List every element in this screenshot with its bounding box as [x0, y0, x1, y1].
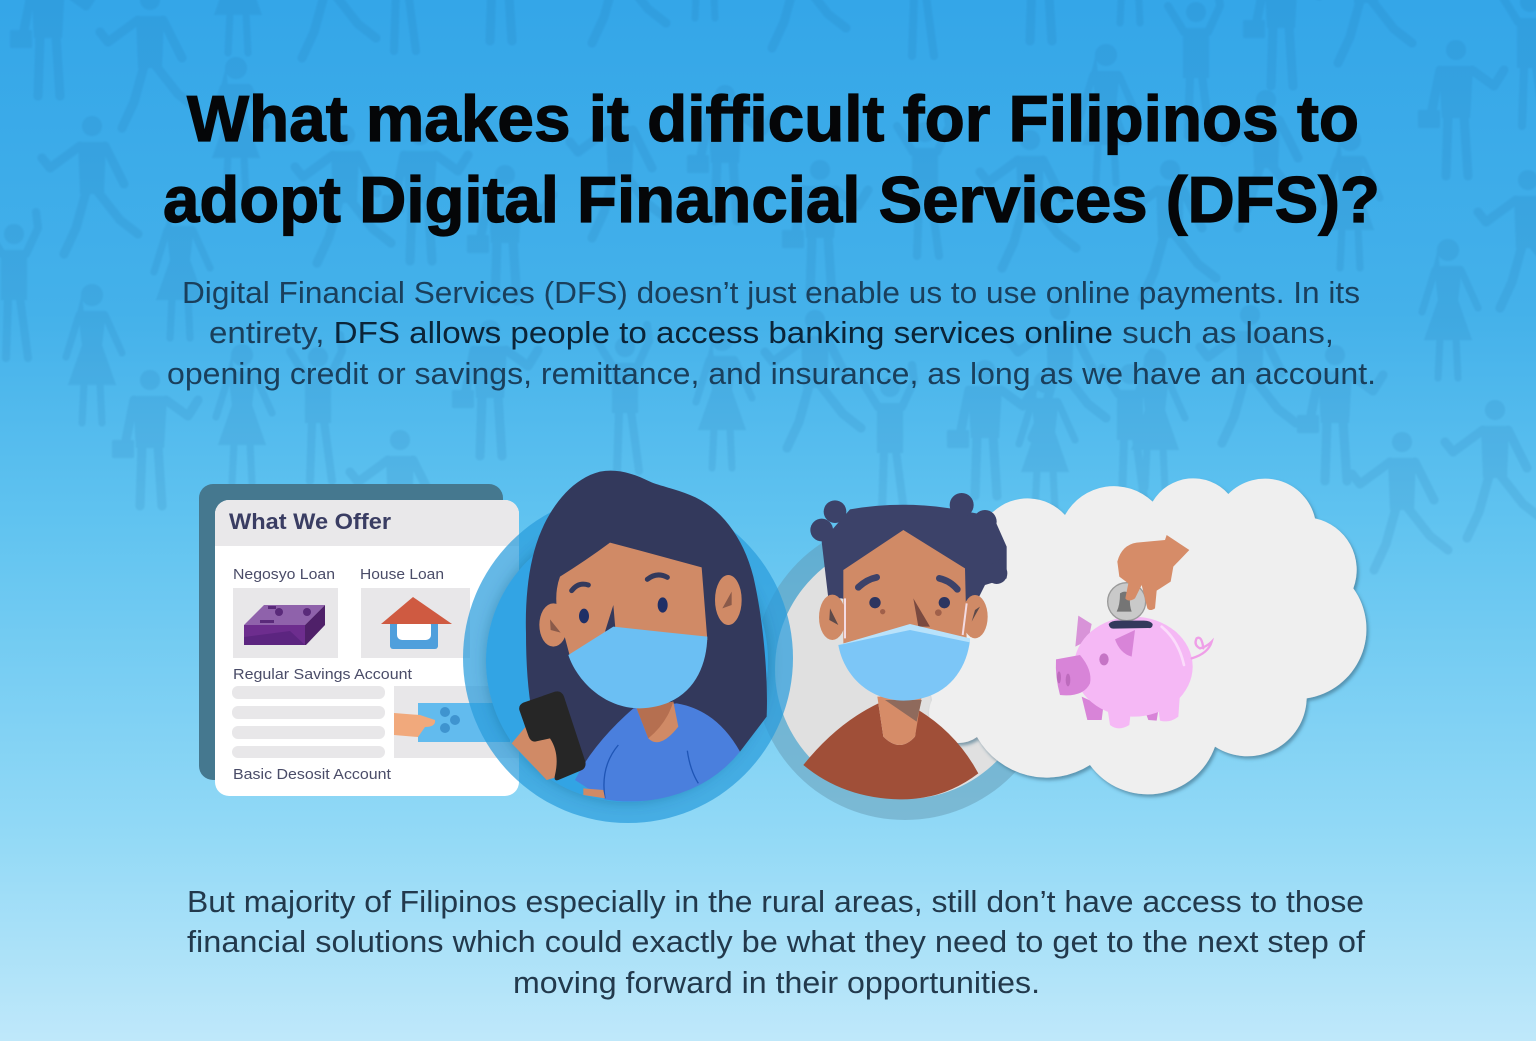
card heading: What We Offer [229, 509, 391, 534]
intro paragraph [167, 275, 1376, 391]
closing paragraph [187, 884, 1365, 1000]
intro paragraph: Digital Financial Services (DFS) doesn’t just enable us to use online payments. In its [182, 275, 1360, 310]
neck [637, 702, 678, 742]
hair [810, 493, 1007, 603]
text placeholder bars [232, 686, 385, 758]
panel: bank offers card [199, 484, 519, 796]
intro paragraph: entirety, DFS allows people to access banking services online such as loans, [209, 315, 1334, 350]
panel: thought cloud with piggy bank [928, 478, 1366, 794]
icon: hand dropping coin [1117, 535, 1189, 610]
title [163, 82, 1380, 236]
hand [512, 723, 560, 780]
phone [519, 691, 586, 780]
label: negosyo loan: Negosyo Loan [233, 566, 335, 583]
background: crowd of people [0, 0, 1536, 570]
label: basic deposit account: Basic Desosit Account [233, 766, 392, 783]
ears [819, 595, 988, 640]
shirt [803, 703, 978, 799]
face [556, 543, 707, 657]
ears [539, 575, 742, 647]
icon: house [361, 588, 470, 658]
neck [877, 697, 922, 745]
title: What makes it difficult for Filipinos to [187, 82, 1359, 155]
title: adopt Digital Financial Services (DFS)? [163, 163, 1380, 236]
panel: woman circle backdrop [463, 493, 793, 823]
icon: money stack [233, 588, 338, 658]
panel: man in circle backdrop [754, 518, 1056, 820]
character: man wearing mask [803, 493, 1007, 799]
character: woman wearing mask holding phone [512, 471, 767, 801]
icon: hand holding banknote [394, 686, 519, 758]
label: house loan: House Loan [360, 566, 444, 583]
shirt [575, 703, 740, 801]
hair [526, 471, 767, 767]
closing paragraph: moving forward in their opportunities. [513, 965, 1040, 1000]
face mask [568, 627, 707, 708]
face mask [838, 625, 970, 701]
closing paragraph: But majority of Filipinos especially in the rural areas, still don’t have access to those [187, 884, 1364, 919]
face [843, 530, 967, 643]
label: regular savings account: Regular Savings Account [233, 666, 413, 683]
intro paragraph: opening credit or savings, remittance, and insurance, as long as we have an account. [167, 356, 1376, 391]
icon: piggy bank [1056, 583, 1212, 728]
closing paragraph: financial solutions which could exactly be what they need to get to the next step of [187, 924, 1365, 959]
